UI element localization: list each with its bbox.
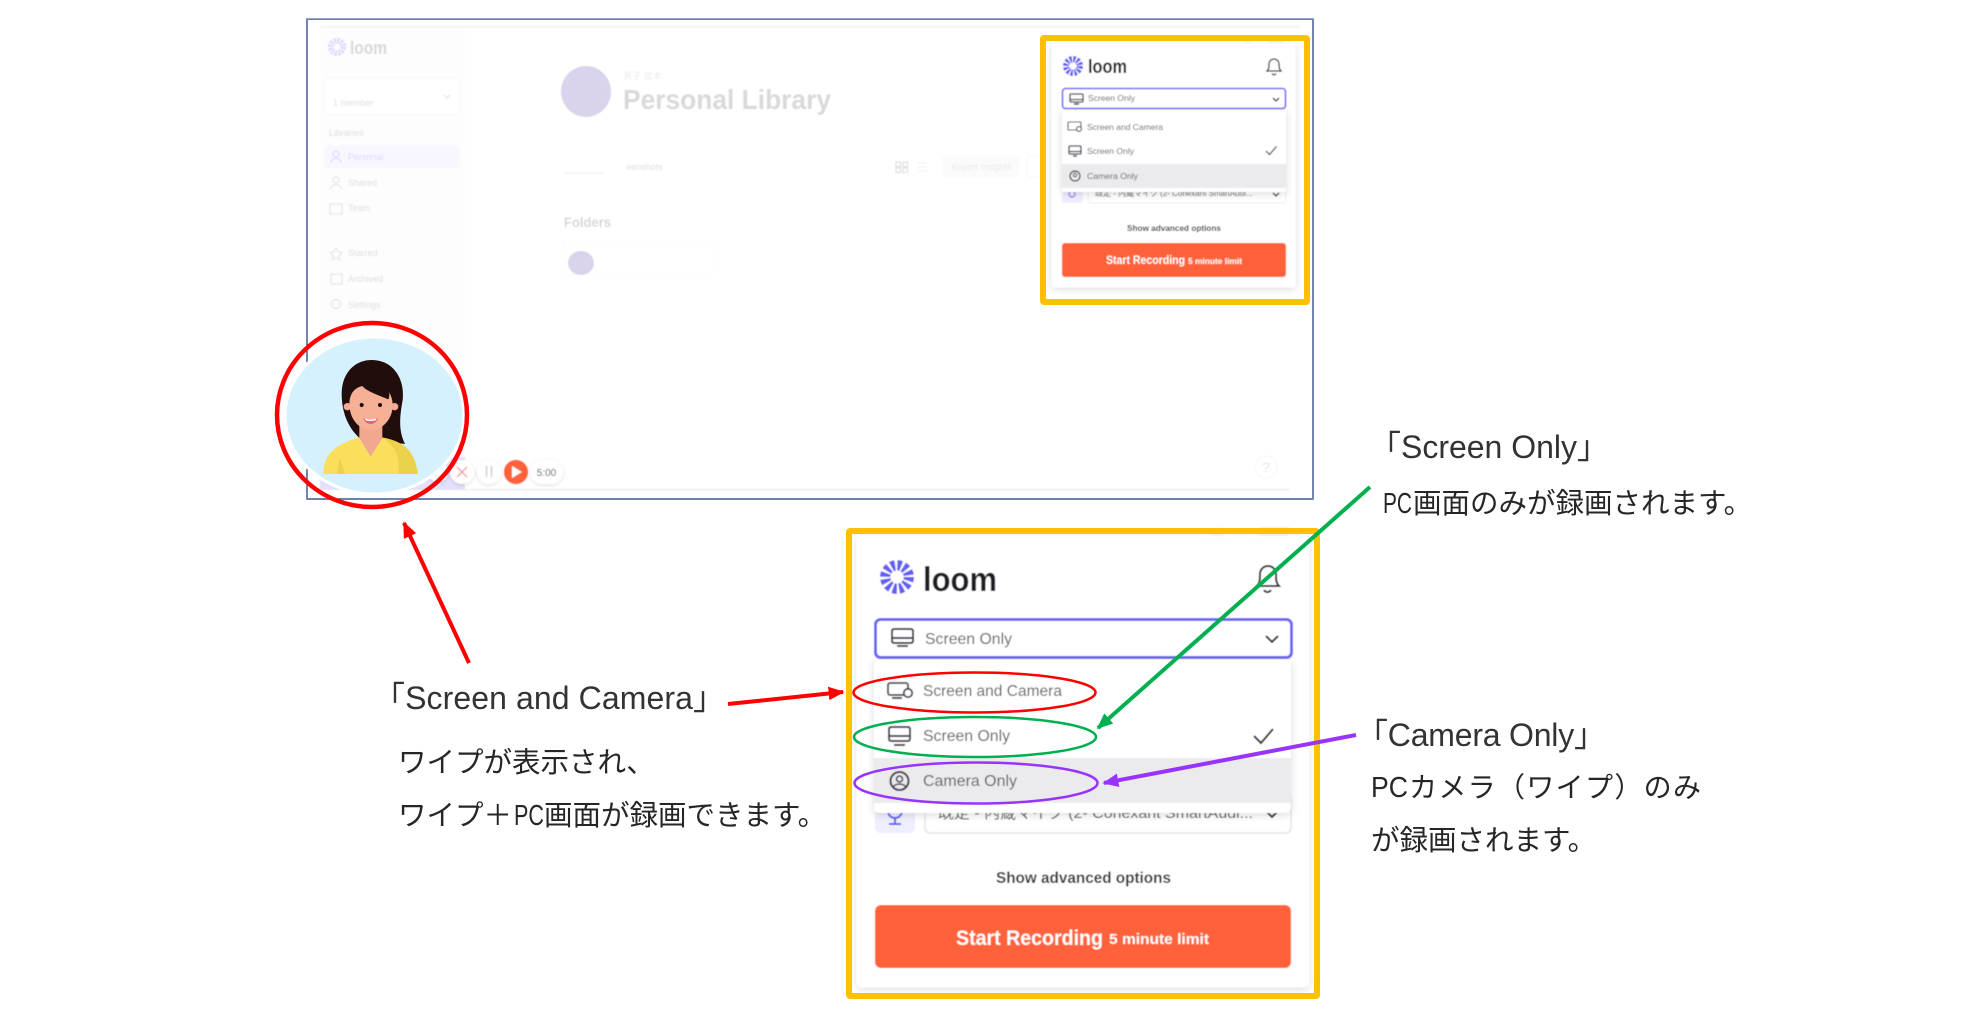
sidebar workspace dropdown: 1 member — [333, 98, 374, 108]
sidebar libraries nav: Settings — [348, 300, 381, 310]
library tabs and toolbar — [564, 156, 1041, 177]
sidebar libraries nav: Archived — [348, 274, 383, 284]
sidebar libraries nav: Shared — [348, 178, 377, 188]
small dropdown menu: Camera Only — [1087, 171, 1139, 181]
library title: Personal Library — [623, 84, 831, 115]
small advanced options link: Show advanced options — [1127, 223, 1221, 233]
help button: ? — [1262, 459, 1270, 475]
large start recording button: 5 minute limit — [1109, 931, 1209, 948]
small dropdown menu: Screen and Camera — [1087, 122, 1163, 132]
panel: large recorder popup — [857, 527, 1309, 987]
screenshot frame — [307, 18, 1313, 500]
large mode select: Screen Only — [925, 631, 1012, 648]
library tabs and toolbar: Export Insights — [952, 162, 1012, 172]
large logo — [885, 561, 997, 599]
option: screen only: Screen Only — [923, 728, 1010, 745]
small mode select — [1062, 88, 1286, 108]
library tabs and toolbar: eenshots — [626, 162, 663, 172]
recording toolbar — [320, 457, 563, 490]
callout: screen and camera: 画面が録画できます。 — [544, 800, 826, 832]
callout: camera only: カメラ（ワイプ）のみ — [1409, 772, 1701, 803]
highlight ellipse: camera only — [854, 762, 1098, 804]
small start recording button: Start Recording — [1106, 255, 1185, 267]
sidebar libraries nav: Starred — [348, 248, 378, 258]
small bell icon — [1267, 59, 1281, 75]
callout: screen only — [1369, 429, 1752, 520]
callout: camera only: が録画されます。 — [1371, 825, 1596, 857]
large dropdown menu — [874, 659, 1291, 813]
callout: screen and camera: ワイプが表示され、 — [398, 747, 655, 779]
large mode select — [876, 620, 1292, 658]
option: screen only — [889, 727, 1273, 745]
panel: small recorder popup — [1052, 38, 1295, 287]
large start recording button: Start Recording — [956, 927, 1103, 950]
folder card — [564, 241, 714, 275]
small mic row — [1062, 188, 1286, 203]
callout: camera only: PC — [1371, 772, 1408, 804]
sidebar libraries nav — [324, 128, 460, 310]
option: camera only — [890, 772, 1017, 790]
small logo: loom — [1088, 57, 1127, 78]
callout: screen and camera: PC — [514, 800, 544, 832]
folders heading: Folders — [564, 214, 611, 230]
icon: webcam bubble with woman — [285, 337, 464, 494]
small mic row: 既定 - 内蔵マイク (2- Conexant SmartAudi... — [1095, 188, 1253, 198]
woman illustration — [323, 360, 418, 474]
sidebar logo — [331, 38, 387, 58]
large mic row — [875, 795, 1291, 833]
option: screen and camera: Screen and Camera — [923, 683, 1062, 700]
callout: screen only: PC — [1383, 488, 1412, 520]
small dropdown menu: Screen Only — [1087, 146, 1135, 156]
highlight ellipse: screen and camera — [854, 672, 1096, 712]
callout: camera only — [1356, 717, 1701, 857]
arrow: to screen only option — [1098, 487, 1370, 728]
owner name: 男子 並木 — [623, 70, 662, 81]
callout: screen and camera: 「Screen and Camera」 — [373, 680, 725, 716]
arrow: to camera only option — [1104, 735, 1356, 783]
arrow: to webcam bubble — [404, 523, 469, 663]
callout: camera only: 「Camera Only」 — [1356, 717, 1606, 753]
small dropdown menu — [1062, 110, 1286, 192]
sidebar workspace dropdown — [324, 78, 460, 115]
sidebar libraries nav: Team — [348, 203, 370, 213]
arrow: to screen and camera option — [728, 692, 843, 704]
callout: screen only: 「Screen Only」 — [1369, 429, 1609, 465]
panel: faded Loom library screenshot — [307, 19, 1313, 499]
large start recording button — [875, 905, 1291, 968]
callout: screen and camera: ワイプ＋ — [398, 800, 512, 832]
highlight ellipse: screen only — [854, 717, 1096, 757]
large advanced options link: Show advanced options — [996, 870, 1171, 887]
help button — [1255, 456, 1277, 478]
library avatar — [561, 66, 611, 117]
callout ring: webcam bubble — [277, 323, 467, 507]
large logo: loom — [923, 561, 997, 599]
large bell icon — [1257, 566, 1279, 592]
callout: screen and camera — [373, 680, 826, 832]
highlight frame: large popup — [849, 531, 1317, 996]
highlight frame: small popup — [1043, 38, 1307, 302]
callout: screen only: 画面のみが録画されます。 — [1413, 488, 1752, 520]
option: camera only: Camera Only — [923, 773, 1017, 790]
recording toolbar: 5:00 — [537, 468, 557, 479]
small start recording button — [1062, 243, 1286, 277]
small mode select: Screen Only — [1088, 93, 1136, 103]
sidebar libraries nav: Libraries — [329, 128, 364, 138]
small start recording button: 5 minute limit — [1188, 257, 1242, 266]
sidebar logo: loom — [350, 38, 387, 58]
large mic row: 既定 - 内蔵マイク (2- Conexant SmartAudi... — [938, 805, 1253, 822]
sidebar libraries nav: Personal — [348, 152, 384, 162]
small logo — [1066, 57, 1127, 78]
